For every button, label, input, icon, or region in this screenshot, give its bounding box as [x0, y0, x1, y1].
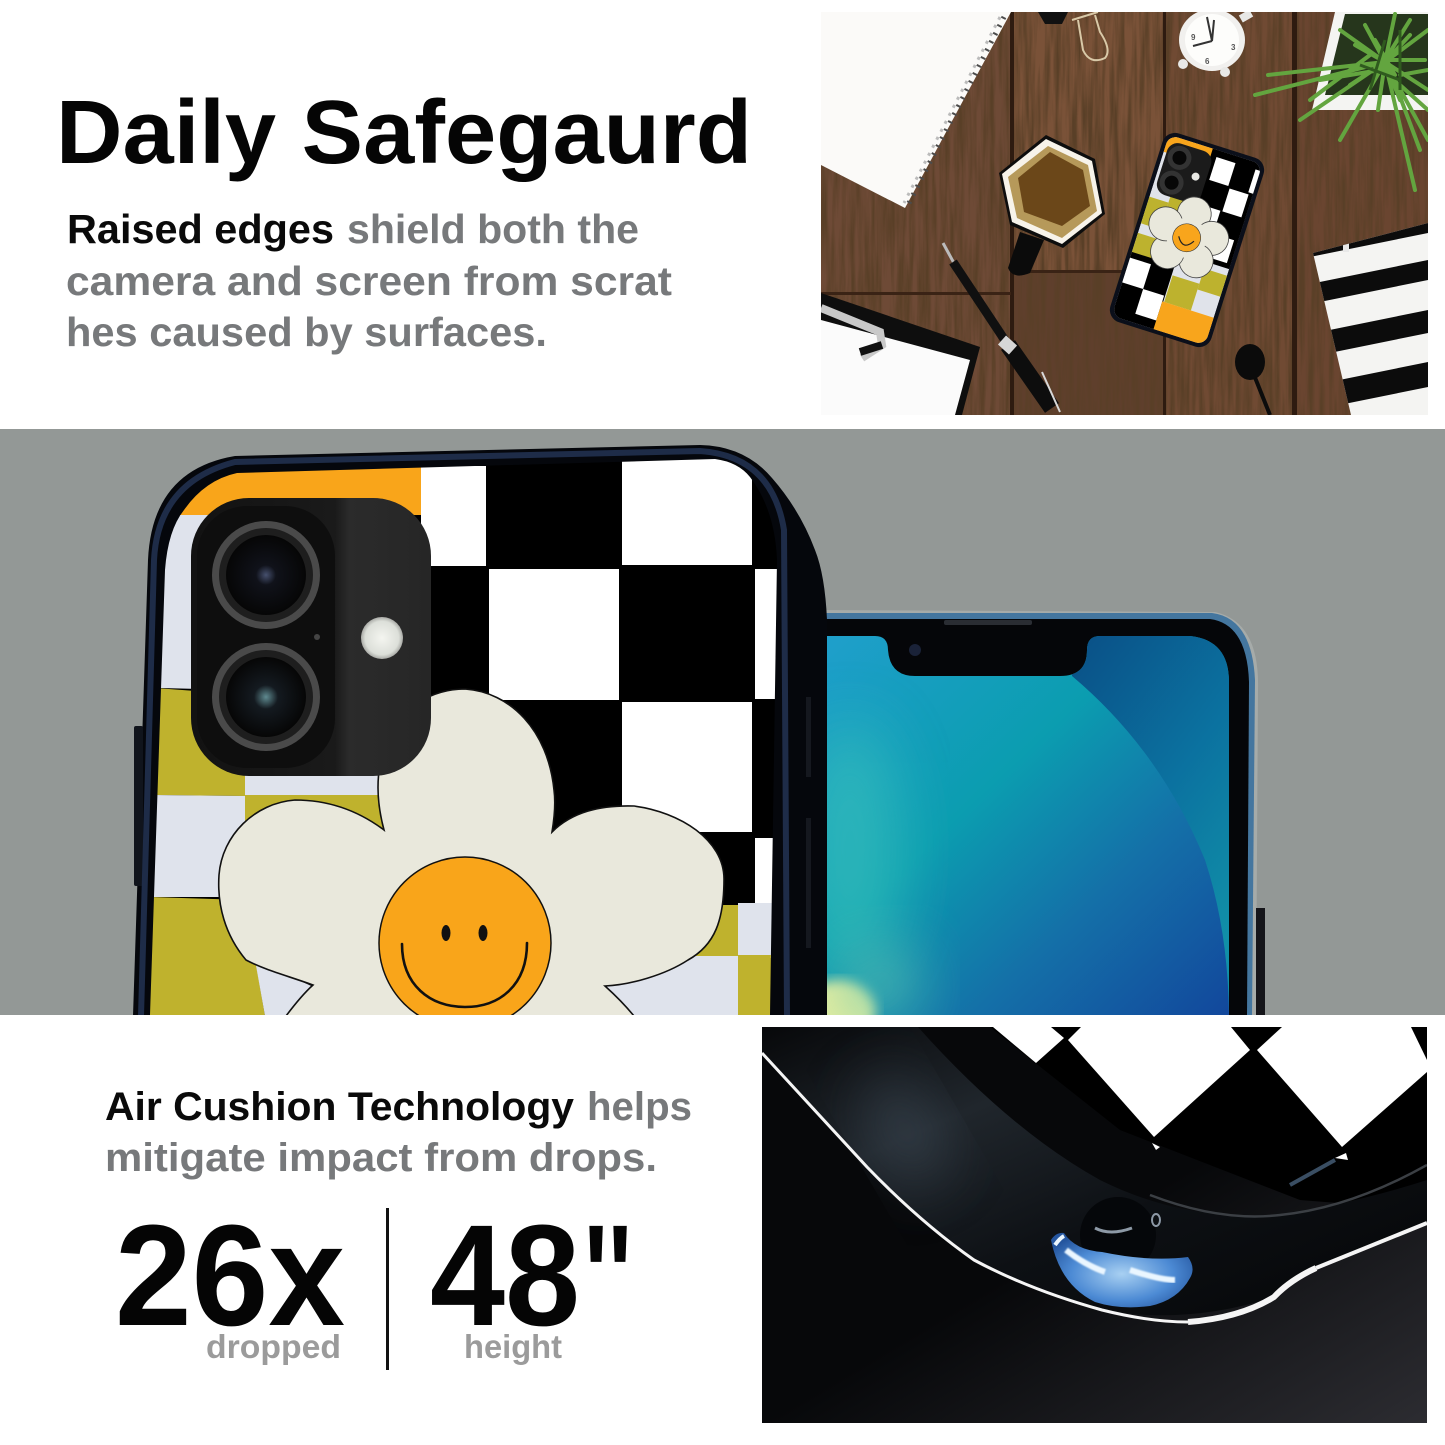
lens: top — [212, 521, 320, 629]
stat: 48 inch height: '' — [584, 1195, 632, 1356]
case bumper — [762, 1027, 1427, 1315]
text block: raised edges description: shield both the — [347, 206, 639, 252]
text block: raised edges description: hes caused by surfaces. — [66, 309, 547, 355]
photo: desk flat lay with phone case — [821, 9, 1440, 425]
checker pattern — [990, 1027, 1427, 1210]
text block: air cushion description: helps — [587, 1085, 692, 1129]
text block: air cushion description: mitigate impact from drops. — [105, 1136, 657, 1180]
water drop — [1051, 1197, 1193, 1307]
stat: 26x dropped: 26x — [115, 1195, 345, 1356]
flash — [361, 617, 403, 659]
clock: 9 — [1191, 33, 1196, 42]
coffee cup — [999, 135, 1105, 276]
text block: raised edges description: Raised edges — [67, 206, 334, 252]
camera module — [191, 498, 431, 776]
smiley face — [379, 857, 551, 1029]
text block: raised edges description — [66, 206, 672, 355]
wood planks — [821, 12, 1428, 415]
small phone case on desk — [1107, 130, 1267, 350]
text block: air cushion description: Air Cushion Technology — [105, 1085, 575, 1129]
text block: air cushion description — [105, 1085, 692, 1180]
stat: 48 inch height: 48 — [430, 1195, 580, 1356]
phone front with blue frame — [826, 610, 1265, 1015]
clock: 6 — [1205, 57, 1210, 66]
clock: 3 — [1231, 43, 1236, 52]
phone case back — [133, 445, 827, 1029]
panel: grey band with phone close-up — [0, 429, 1445, 1044]
notebook — [821, 12, 1011, 208]
stat: 48 inch height: height — [464, 1328, 562, 1365]
lens: bottom — [212, 643, 320, 751]
binder clip — [1038, 12, 1108, 60]
striped notebook — [1313, 223, 1428, 415]
title: Daily Safegaurd — [56, 83, 752, 183]
pen — [943, 243, 1060, 412]
white rim highlight — [762, 1053, 1427, 1322]
text block: raised edges description: camera and screen from scrat — [66, 258, 672, 304]
flower — [219, 689, 724, 1016]
stat: 26x dropped: dropped — [206, 1328, 341, 1365]
photo: air cushion corner close-up — [762, 1027, 1427, 1423]
divider — [386, 1208, 389, 1370]
case print: checkerboard — [140, 450, 790, 1029]
spoon — [1235, 344, 1270, 415]
phone screen wallpaper — [827, 636, 1229, 1015]
clock — [1178, 9, 1253, 77]
plant — [1255, 12, 1428, 190]
clipboard — [821, 293, 980, 415]
